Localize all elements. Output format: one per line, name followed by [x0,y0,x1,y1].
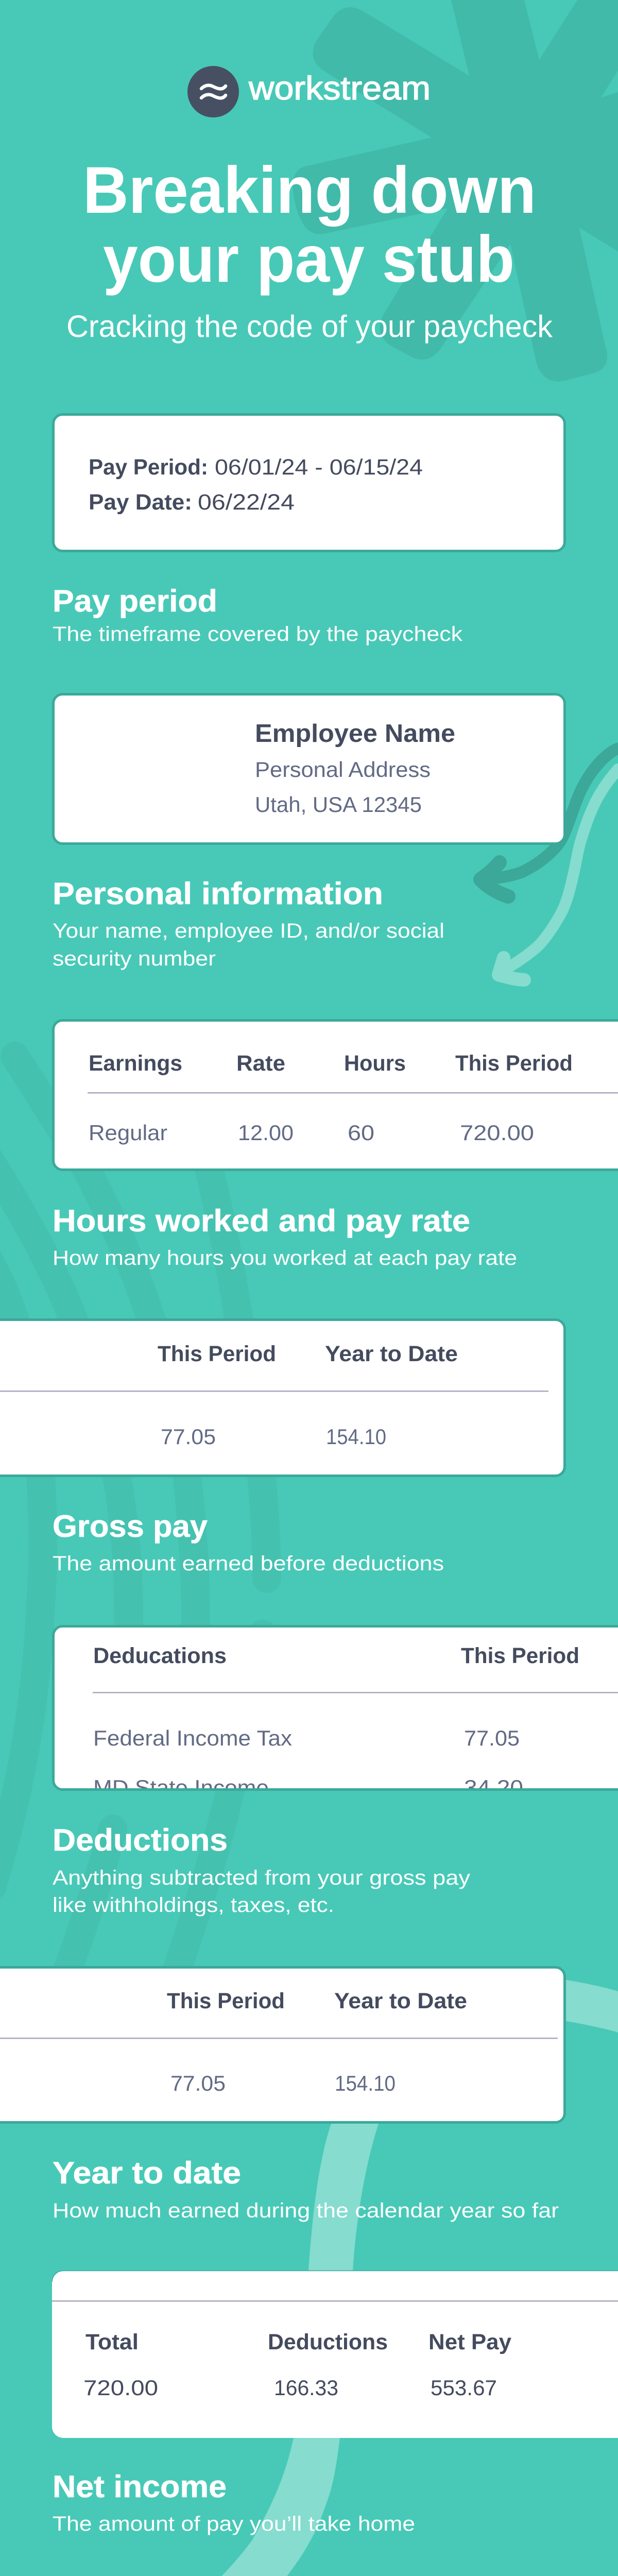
heading: gross pay: Gross pay [53,1509,208,1544]
heading: net income: The amount of pay you’ll take home [53,2513,415,2535]
panel: net income table: 720.00 [83,2376,158,2400]
panel: deductions table: Federal Income Tax [93,1726,292,1750]
heading: year to date: How much earned during the calendar year so far [53,2199,559,2222]
heading: personal information: Your name, employee ID, and/or social [53,920,444,942]
panel: earnings table: This Period [455,1051,573,1076]
panel: pay period card: 06/22/24 [198,490,295,515]
panel: earnings table: Regular [89,1121,167,1145]
panel: employee card [54,694,564,844]
panel: deductions table: This Period [461,1643,579,1668]
heading: gross pay [53,1509,444,1575]
arrow: light arrow to earnings table [499,769,618,980]
panel: earnings table: 12.00 [238,1121,294,1145]
panel: earnings table: Rate [236,1051,285,1076]
panel: deductions table: 77.05 [464,1726,520,1750]
logo icon [187,66,239,117]
background asterisk shape [293,0,618,381]
panel: net income table: Total [85,2330,139,2354]
panel: pay period card [54,414,564,551]
panel: year to date table: This Period [167,1989,285,2013]
arrow: dark arrow to personal information [480,749,618,896]
panel: deductions table: Deducations [93,1643,227,1668]
panel: earnings table [54,1020,618,1170]
heading: pay period: Pay period [53,584,217,618]
panel: employee card: Personal Address [255,757,431,782]
logo wordmark: workstream [248,70,431,107]
panel: earnings table: Earnings [89,1051,182,1076]
panel: deductions table: MD State Income [93,1775,269,1800]
panel: employee card: Employee Name [255,720,455,748]
heading: personal information: security number [53,947,216,970]
subtitle: Cracking the code of your paycheck [66,309,553,344]
panel: earnings table: 60 [348,1121,374,1145]
panel: net income table: Net Pay [428,2330,511,2354]
heading: hours worked and pay rate: Hours worked and pay rate [53,1204,470,1238]
heading: personal information: Personal information [53,876,383,911]
heading: hours worked and pay rate: How many hours you worked at each pay rate [53,1247,517,1269]
panel: pay period card: 06/01/24 - 06/15/24 [215,455,423,480]
panel: pay period card: Pay Period: [89,455,208,480]
panel: deductions table [54,1626,618,1800]
heading: deductions: Anything subtracted from your gross pay [53,1867,470,1889]
background light arc [172,1978,618,2576]
heading: net income [53,2469,415,2535]
panel: net income table: 553.67 [431,2376,497,2400]
panel: earnings table: 720.00 [460,1121,534,1145]
panel: pay period card: Pay Date: [89,490,192,515]
heading: pay period: The timeframe covered by the paycheck [53,623,463,646]
heading: deductions: like withholdings, taxes, etc. [53,1894,334,1917]
panel: net income table [52,2270,618,2438]
heading: personal information [53,876,444,970]
title: Breaking down [83,154,536,227]
heading: deductions [53,1823,470,1917]
heading: net income: Net income [53,2469,227,2504]
panel: net income table: Deductions [268,2330,388,2354]
background curved bands [0,1056,267,1994]
heading: deductions: Deductions [53,1823,228,1857]
heading: year to date [53,2156,559,2222]
panel: gross pay table: Year to Date [325,1342,458,1366]
logo [187,66,431,117]
heading: year to date: Year to date [53,2156,241,2190]
heading: gross pay: The amount earned before deductions [53,1552,444,1575]
heading: pay period [53,584,463,646]
panel: gross pay table: This Period [158,1342,276,1366]
title [83,154,536,296]
panel: deductions table: 34.20 [464,1775,523,1800]
title: your pay stub [103,223,514,296]
panel: year to date table: 154.10 [335,2071,396,2095]
panel: net income table: 166.33 [274,2376,338,2400]
panel: earnings table: Hours [344,1051,406,1076]
panel: gross pay table [0,1320,564,1476]
panel: employee card: Utah, USA 12345 [255,792,422,817]
panel: year to date table: 77.05 [170,2071,226,2095]
panel: gross pay table: 77.05 [161,1425,216,1449]
panel: year to date table: Year to Date [334,1989,467,2013]
heading: hours worked and pay rate [53,1204,517,1269]
panel: year to date table [0,1967,564,2123]
panel: gross pay table: 154.10 [326,1425,386,1449]
